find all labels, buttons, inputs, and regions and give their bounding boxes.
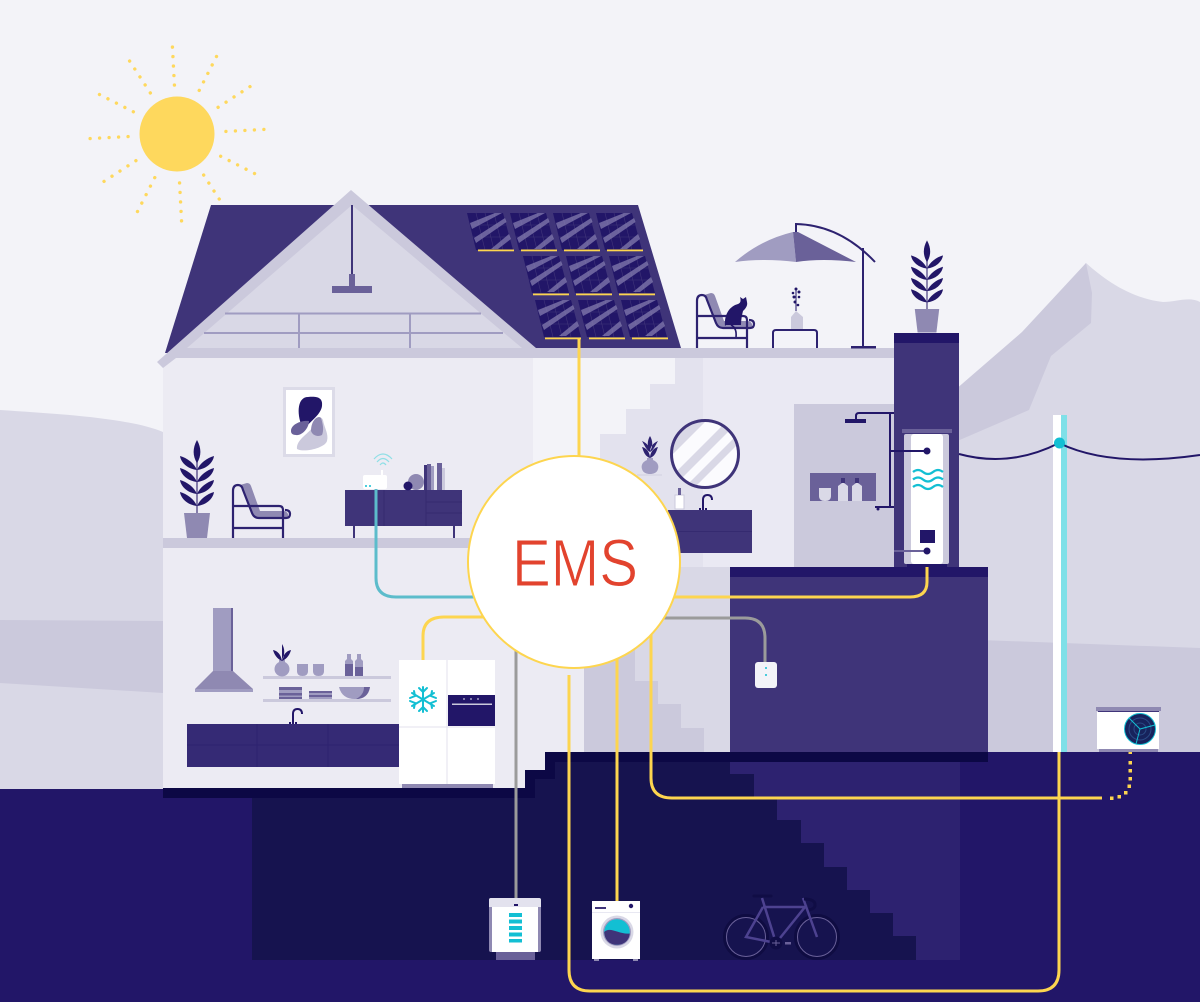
wall picture <box>283 387 335 457</box>
bathroom niche <box>810 473 876 501</box>
wire: boiler <box>660 567 927 597</box>
house walls <box>163 358 895 788</box>
floor slab <box>163 538 508 548</box>
round mirror <box>670 419 740 489</box>
right mountains <box>950 263 1200 760</box>
wire: heat pump dotted <box>1110 752 1132 800</box>
wire: router <box>376 489 480 597</box>
left hills <box>0 410 163 790</box>
battery <box>489 898 541 960</box>
cat <box>725 297 747 337</box>
ground <box>0 752 1200 1002</box>
chimney and block <box>730 333 988 752</box>
wire: heat pump <box>651 630 1102 798</box>
bathroom shelf plant <box>637 436 662 476</box>
pendant lamp <box>332 205 372 293</box>
thermostat <box>755 662 777 688</box>
utility pole <box>959 415 1200 752</box>
heat pump <box>1096 707 1161 752</box>
EMS central circle <box>468 456 680 668</box>
wire: washing machine <box>616 640 618 901</box>
kitchen hood <box>195 608 253 692</box>
sun <box>87 44 267 224</box>
attic railing <box>204 312 503 348</box>
chimney plant <box>911 240 943 332</box>
icon: snowflake <box>410 687 436 712</box>
basement <box>163 752 988 960</box>
shower <box>845 413 927 510</box>
wire: battery <box>514 640 518 898</box>
water boiler <box>890 429 952 567</box>
kitchen counter <box>187 709 399 767</box>
fridge and oven <box>399 660 495 788</box>
parasol <box>735 224 876 348</box>
wire: thermostat <box>650 618 765 662</box>
bathroom sink <box>668 488 752 553</box>
solar panels <box>467 213 668 339</box>
sideboard with books <box>345 463 462 538</box>
washing machine <box>592 901 640 961</box>
wire: mains loop <box>569 675 1059 991</box>
wifi router <box>363 454 392 489</box>
EMS label: EMS <box>512 526 638 601</box>
living room plant <box>180 440 214 538</box>
wire: solar <box>578 338 580 460</box>
side table with vase <box>773 288 817 348</box>
wire: fridge <box>423 617 490 662</box>
bicycle <box>724 896 838 958</box>
kitchen shelves <box>263 644 391 702</box>
terrace chair <box>697 293 754 348</box>
living room chair <box>233 483 290 538</box>
roof <box>157 190 895 368</box>
